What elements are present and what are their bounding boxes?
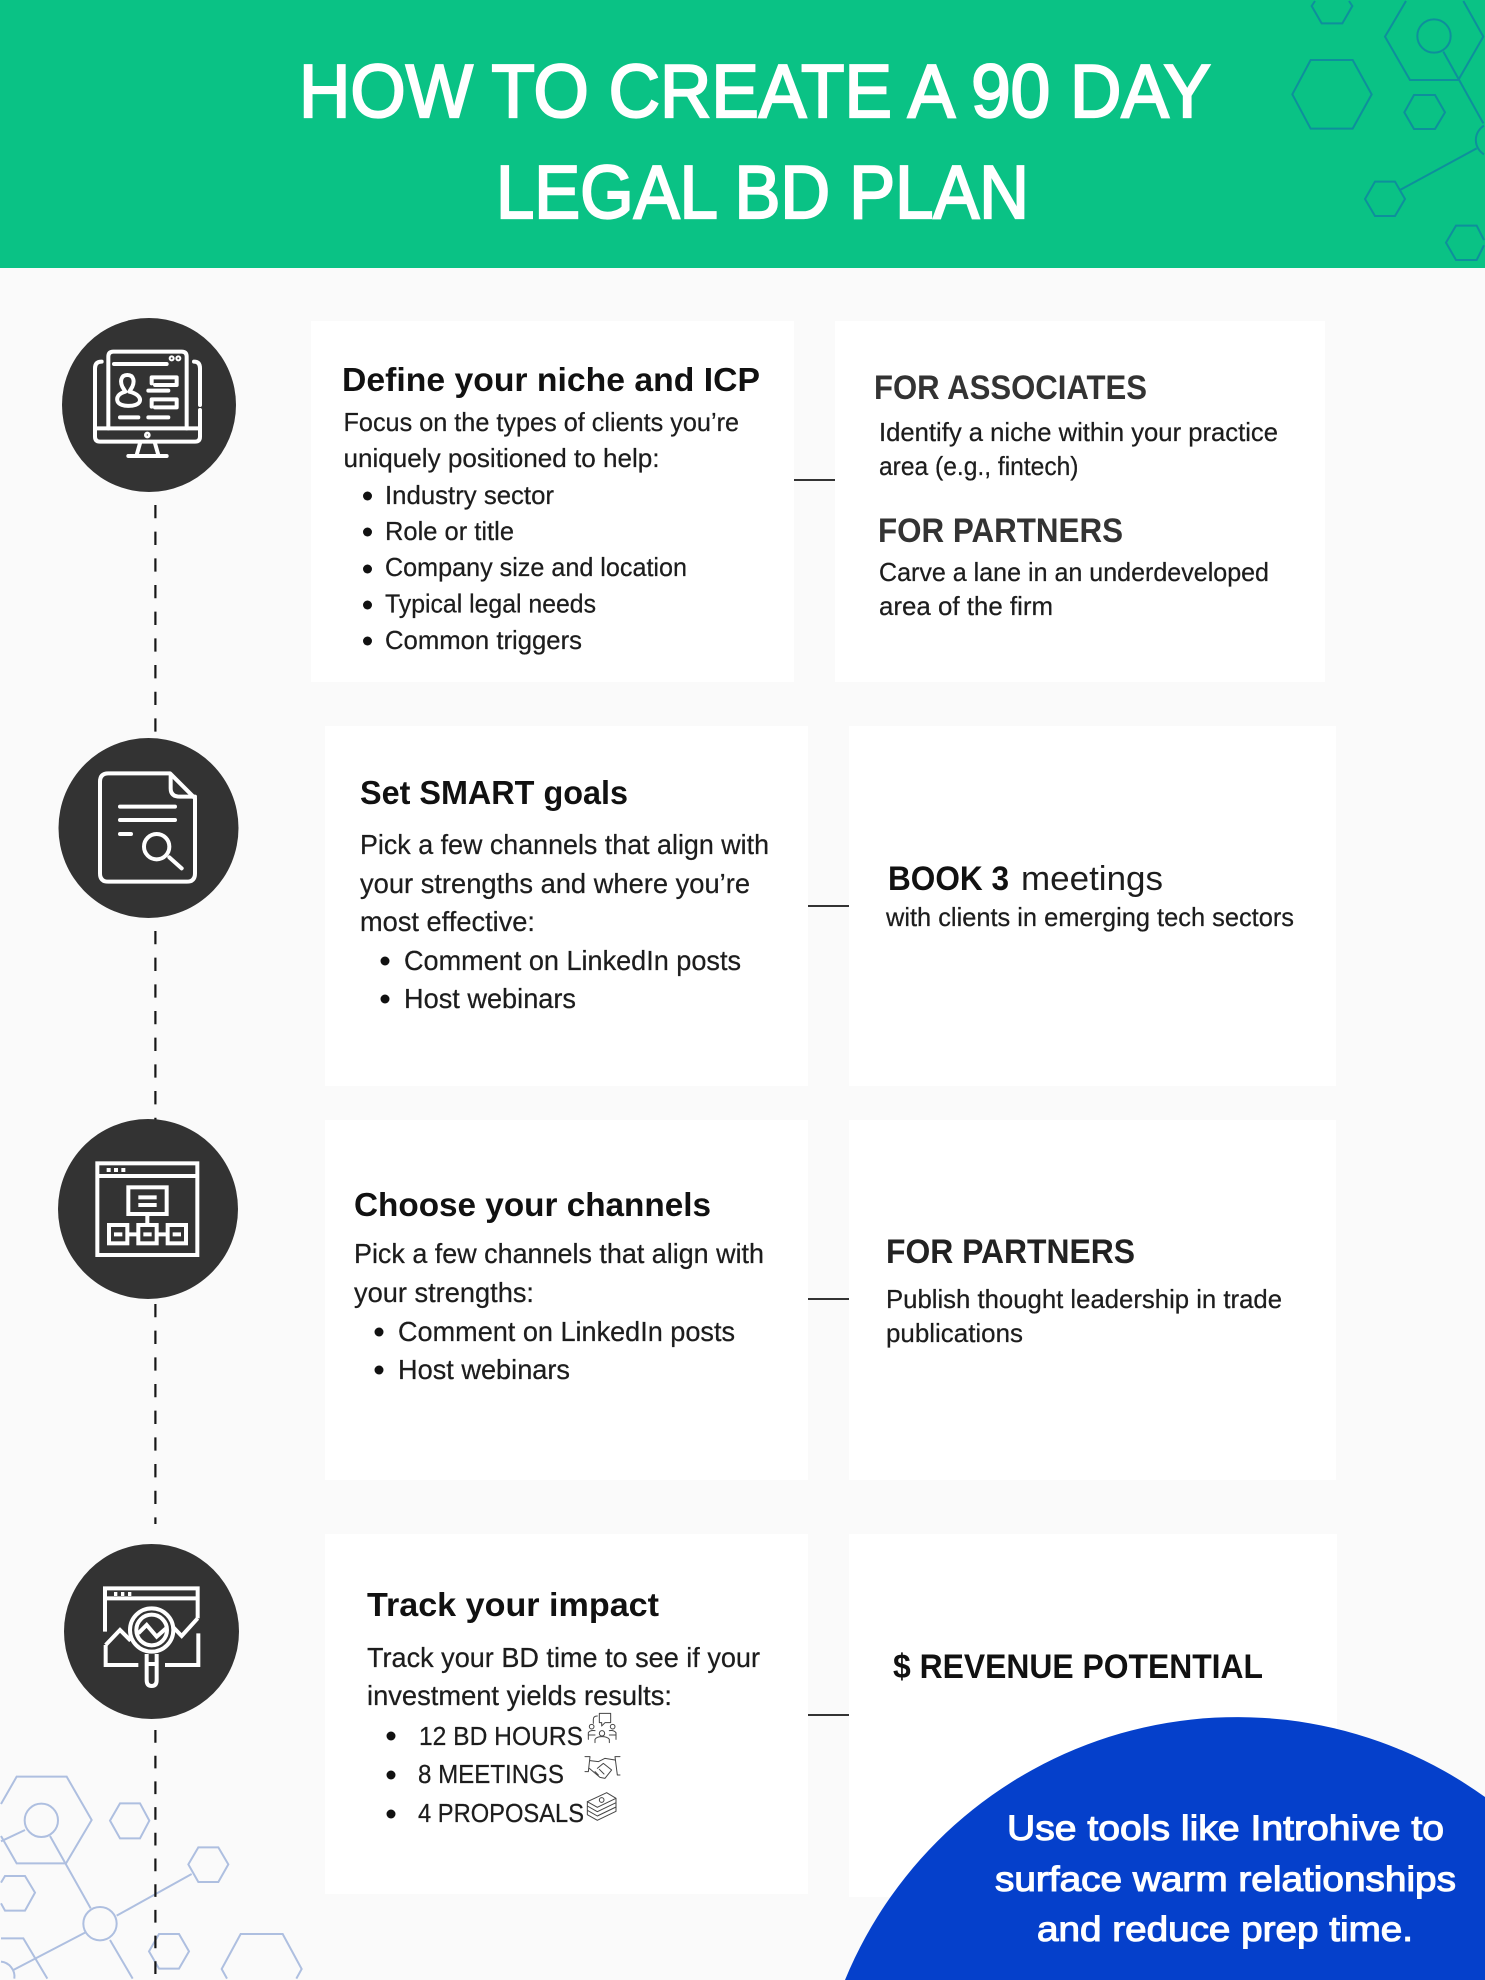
for associates: Identify a niche within your practice xyxy=(879,417,1278,447)
subheading: $ REVENUE POTENTIAL xyxy=(893,1648,1263,1686)
intro text xyxy=(354,1238,764,1308)
metrics list xyxy=(386,1721,584,1828)
bullet list xyxy=(380,945,741,1014)
intro text: uniquely positioned to help: xyxy=(344,443,660,473)
subheading: FOR PARTNERS xyxy=(886,1233,1135,1271)
panel: book 3 meetings xyxy=(849,726,1336,1086)
heading: Define your niche and ICP xyxy=(342,361,760,398)
header hexagon network decoration xyxy=(1292,1,1484,260)
detail text: publications xyxy=(886,1318,1023,1348)
intro text: most effective: xyxy=(360,906,535,937)
icon: stack of money xyxy=(587,1793,616,1820)
intro text xyxy=(344,407,739,473)
for associates xyxy=(874,369,1278,481)
for partners xyxy=(878,512,1269,621)
goal detail: with clients in emerging tech sectors xyxy=(885,902,1294,932)
title xyxy=(299,49,1211,234)
panel: define your niche and ICP xyxy=(311,321,794,682)
heading: Track your impact xyxy=(367,1586,659,1623)
bullet list: Company size and location xyxy=(385,552,687,582)
for partners: area of the firm xyxy=(879,591,1053,621)
dashed timeline xyxy=(154,505,156,1980)
goal statement: meetings xyxy=(1021,860,1163,898)
for partners: FOR PARTNERS xyxy=(878,512,1123,550)
icon: browser with chart magnifier, step 4 xyxy=(64,1544,239,1719)
bullet list: Industry sector xyxy=(385,480,554,510)
detail text: Publish thought leadership in trade xyxy=(886,1284,1282,1314)
metrics list: 8 MEETINGS xyxy=(418,1759,564,1789)
title: LEGAL BD PLAN xyxy=(496,150,1029,234)
header banner xyxy=(0,0,1485,268)
icon: handshake xyxy=(585,1757,620,1778)
bullet list: Comment on LinkedIn posts xyxy=(398,1316,735,1347)
bullet list: Host webinars xyxy=(398,1354,570,1385)
bullet list: Host webinars xyxy=(404,983,576,1014)
title: HOW TO CREATE A 90 DAY xyxy=(299,49,1211,133)
bullet list: Role or title xyxy=(385,516,514,546)
panel: associates and partners xyxy=(835,321,1325,682)
intro text: Track your BD time to see if your xyxy=(367,1642,760,1673)
bottom-left hexagon network decoration xyxy=(1,1777,302,1979)
icon: document with magnifier, step 2 xyxy=(58,738,238,918)
intro text xyxy=(367,1642,760,1711)
bullet list: Typical legal needs xyxy=(385,588,596,618)
icon: people meeting xyxy=(588,1713,616,1743)
for associates: area (e.g., fintech) xyxy=(879,451,1078,481)
metrics list: 4 PROPOSALS xyxy=(418,1798,584,1828)
panel: revenue potential xyxy=(849,1534,1337,1897)
connector 2 xyxy=(808,905,849,907)
panel: choose your channels xyxy=(325,1120,808,1480)
panel: track your impact xyxy=(325,1534,808,1894)
intro text xyxy=(360,829,769,937)
detail text xyxy=(886,1284,1282,1348)
heading: Set SMART goals xyxy=(360,774,628,811)
heading: Choose your channels xyxy=(354,1186,711,1223)
intro text: Pick a few channels that align with xyxy=(354,1238,764,1269)
for partners: Carve a lane in an underdeveloped xyxy=(879,557,1269,587)
connector 3 xyxy=(808,1298,849,1300)
bullet list xyxy=(363,480,687,655)
goal statement: BOOK 3 xyxy=(888,860,1009,898)
callout: Introhive tip: and reduce prep time. xyxy=(1037,1910,1413,1949)
callout: Introhive tip: surface warm relationships xyxy=(995,1860,1456,1899)
intro text: your strengths and where you’re xyxy=(360,868,750,899)
intro text: your strengths: xyxy=(354,1277,534,1308)
goal statement xyxy=(888,860,1163,898)
panel: for partners channels xyxy=(849,1120,1336,1480)
intro text: Focus on the types of clients you’re xyxy=(344,407,739,437)
bullet list xyxy=(374,1316,735,1385)
panel: set SMART goals xyxy=(325,726,808,1086)
connector 4 xyxy=(808,1714,849,1716)
bullet list: Common triggers xyxy=(385,625,582,655)
icon: monitor with profile, step 1 xyxy=(62,318,236,492)
callout: Introhive tip: Use tools like Introhive to xyxy=(1007,1809,1444,1848)
connector 1 xyxy=(794,479,835,481)
icon: browser with flow chart, step 3 xyxy=(58,1119,238,1299)
for associates: FOR ASSOCIATES xyxy=(874,369,1147,407)
callout: Introhive tip xyxy=(845,1717,1485,1980)
metrics list: 12 BD HOURS xyxy=(419,1721,583,1751)
intro text: Pick a few channels that align with xyxy=(360,829,769,860)
bullet list: Comment on LinkedIn posts xyxy=(404,945,741,976)
intro text: investment yields results: xyxy=(367,1680,672,1711)
